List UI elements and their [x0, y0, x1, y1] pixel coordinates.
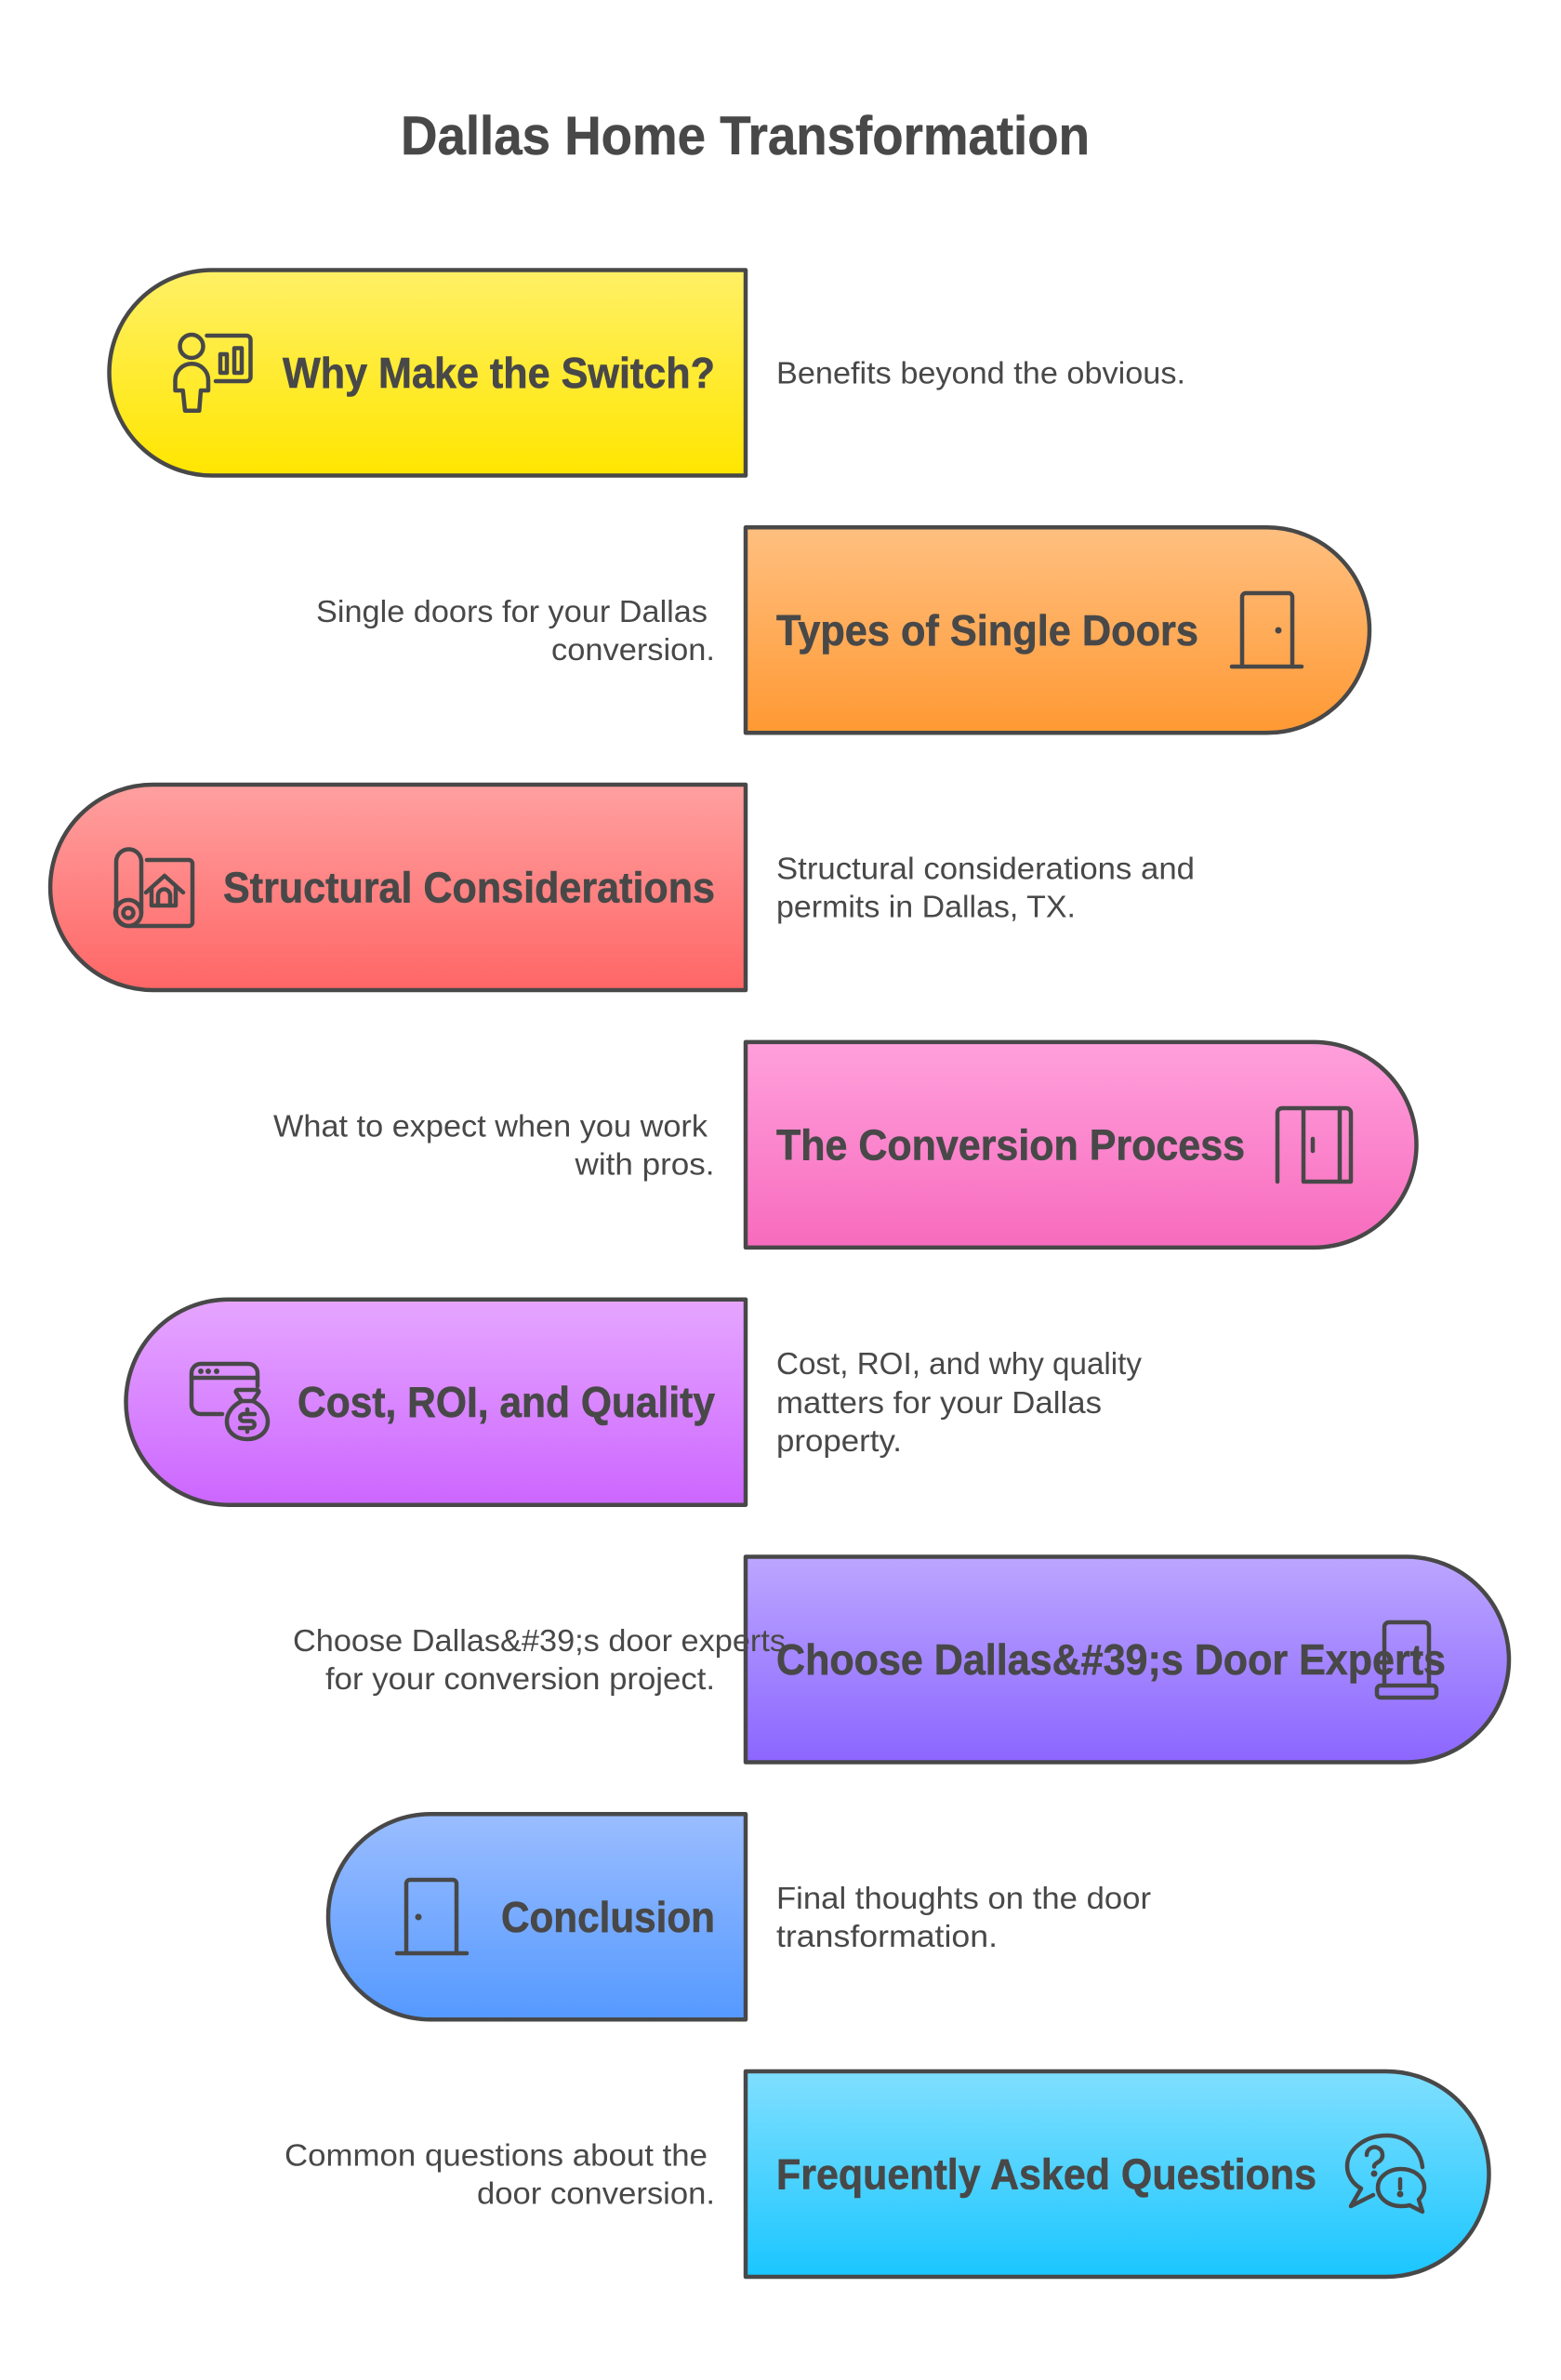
pill shape: violet: [746, 1556, 1509, 1763]
description: single doors: conversion.: [551, 633, 715, 668]
pill shape: red: [50, 785, 746, 990]
description: what to expect: with pros.: [574, 1147, 714, 1182]
description: structural: Structural considerations and: [776, 852, 1195, 887]
label: The Conversion Process: [776, 1120, 1245, 1169]
description: conclusion: transformation.: [776, 1920, 998, 1954]
panel: The Conversion Process: [746, 1042, 1417, 1248]
pill shape: purple: [126, 1300, 746, 1505]
description: cost: property.: [776, 1424, 902, 1459]
description: choose experts: Choose Dallas&#39;s door experts: [293, 1624, 786, 1659]
description: choose experts: for your conversion project.: [325, 1662, 715, 1697]
description: choose experts: [293, 1624, 786, 1697]
icon: door with threshold: [1377, 1622, 1436, 1698]
icon: browser with money bag: [192, 1364, 268, 1439]
description: conclusion: Final thoughts on the door: [776, 1882, 1151, 1916]
label: Choose Dallas&#39;s Door Experts: [776, 1635, 1446, 1684]
description: FAQ: [284, 2138, 715, 2211]
description: benefits: Benefits beyond the obvious.: [776, 357, 1185, 390]
description: what to expect: What to expect when you work: [273, 1109, 708, 1144]
label: Cost, ROI, and Quality: [298, 1378, 715, 1426]
panel: Types of Single Doors: [746, 527, 1369, 733]
icon: door: [397, 1880, 467, 1953]
panel: Cost, ROI, and Quality: [126, 1300, 746, 1505]
panel: Why Make the Switch?: [110, 270, 746, 476]
label: Types of Single Doors: [776, 606, 1198, 654]
pill shape: orange: [746, 527, 1369, 733]
icon: blueprint house: [115, 849, 192, 926]
label: Frequently Asked Questions: [776, 2149, 1316, 2198]
pill shape: cyan: [746, 2071, 1489, 2277]
icon: speech bubbles: [1347, 2135, 1424, 2212]
icon: presenter with chart: [175, 335, 251, 411]
description: structural: permits in Dallas, TX.: [776, 891, 1076, 924]
panel: Conclusion: [328, 1814, 746, 2019]
icon: door: [1232, 593, 1302, 667]
icon: sliding door: [1277, 1108, 1351, 1182]
description: cost: [776, 1347, 1142, 1459]
description: conclusion: [776, 1882, 1151, 1954]
label: Why Make the Switch?: [283, 349, 715, 397]
label: Structural Considerations: [223, 863, 715, 911]
label: Conclusion: [501, 1893, 715, 1941]
title: Dallas Home Transformation: [401, 106, 1090, 166]
description: FAQ: Common questions about the: [284, 2138, 708, 2174]
description: what to expect: [273, 1109, 714, 1182]
description: cost: Cost, ROI, and why quality: [776, 1347, 1142, 1382]
description: FAQ: door conversion.: [477, 2177, 715, 2211]
panel: Choose Dallas&#38;#39;s Door Experts: [746, 1556, 1509, 1763]
panel: Frequently Asked Questions: [746, 2071, 1489, 2277]
description: structural: [776, 852, 1195, 924]
panel: Structural Considerations: [50, 785, 746, 990]
description: cost: matters for your Dallas: [776, 1386, 1102, 1421]
description: single doors: Single doors for your Dallas: [316, 595, 708, 629]
pill shape: blue: [328, 1814, 746, 2019]
description: single doors: [316, 595, 715, 668]
pill shape: pink: [746, 1042, 1417, 1248]
pill shape: yellow: [110, 270, 746, 476]
